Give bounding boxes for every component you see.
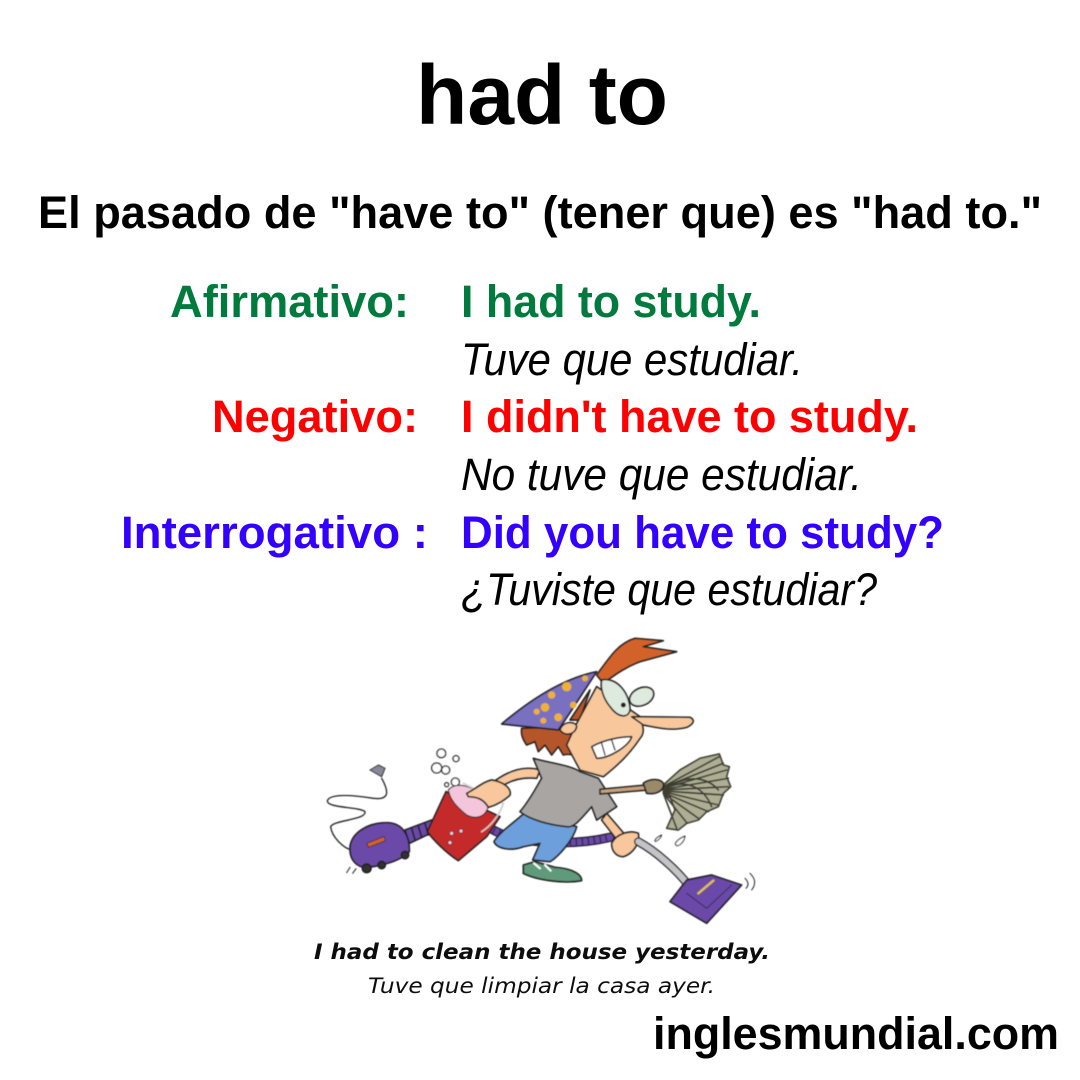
interrogative row: ¿Tuviste que estudiar? xyxy=(461,564,877,615)
affirmative row: Tuve que estudiar. xyxy=(461,334,803,385)
icon: upright vacuum tube and head xyxy=(638,842,755,923)
icon: vacuum cord and plug xyxy=(327,765,387,850)
interrogative row: Interrogativo : xyxy=(121,507,428,558)
caption: I had to clean the house yesterday. xyxy=(314,940,770,964)
affirmative row xyxy=(170,276,803,385)
bandana xyxy=(502,672,597,730)
interrogative row xyxy=(121,507,944,615)
affirmative row: Afirmativo: xyxy=(170,276,409,327)
subtitle: El pasado de "have to" (tener que) es "had to." xyxy=(38,187,1042,238)
negative row xyxy=(212,391,918,500)
interrogative row: Did you have to study? xyxy=(461,507,944,558)
ear xyxy=(560,723,577,734)
icon: water drops xyxy=(655,835,685,846)
caption xyxy=(314,940,770,998)
title: had to xyxy=(416,48,668,142)
negative row: Negativo: xyxy=(212,391,418,442)
body: hands xyxy=(467,780,639,857)
negative row: I didn't have to study. xyxy=(461,391,918,442)
icon: vacuum body xyxy=(347,820,434,873)
body: hose xyxy=(493,830,610,843)
hair xyxy=(597,638,677,683)
glasses xyxy=(601,680,630,716)
negative row: No tuve que estudiar. xyxy=(461,449,862,500)
body: grey shirt xyxy=(520,758,617,827)
icon: suds bubbles xyxy=(432,749,459,787)
affirmative row: I had to study. xyxy=(461,276,761,327)
caption: Tuve que limpiar la casa ayer. xyxy=(368,974,715,998)
neck and face xyxy=(567,687,643,777)
website credit: inglesmundial.com xyxy=(653,1008,1059,1059)
head xyxy=(502,638,693,777)
illustration: woman cleaning xyxy=(327,638,755,923)
icon: feather duster xyxy=(600,754,731,830)
icon: red bucket xyxy=(427,783,503,861)
mouth xyxy=(592,737,632,758)
body: arms xyxy=(492,768,627,842)
nose xyxy=(632,717,693,729)
body: legs and shoe xyxy=(494,814,582,882)
